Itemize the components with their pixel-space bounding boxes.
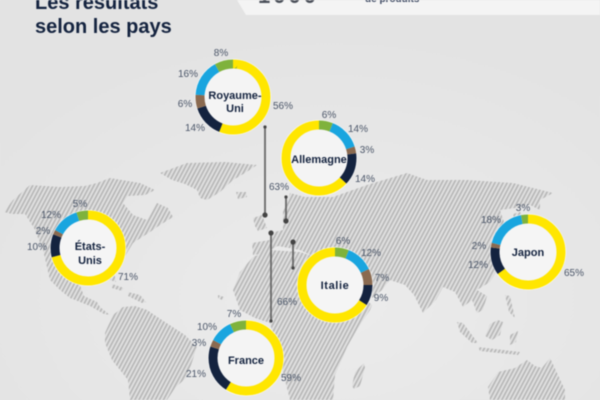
donut: États-Unis: Unis bbox=[78, 255, 102, 267]
donut: Royaume-Uni: 8% bbox=[214, 48, 228, 59]
donut: Allemagne: Allemagne bbox=[291, 154, 347, 166]
donut: Japon: Japon bbox=[512, 247, 544, 259]
donut: Royaume-Uni: Royaume- bbox=[208, 90, 262, 102]
donut: Royaume-Uni: 56% bbox=[273, 101, 293, 112]
donut: Allemagne: 6% bbox=[322, 110, 336, 121]
donut: France: 7% bbox=[227, 309, 241, 320]
donut: Italie bbox=[277, 236, 389, 323]
donut: France: 59% bbox=[281, 373, 301, 384]
donut: Royaume-Uni: 6% bbox=[178, 99, 192, 110]
donut: États-Unis: 10% bbox=[27, 242, 47, 253]
donut: Italie: 9% bbox=[374, 293, 388, 304]
donut: France: 21% bbox=[186, 369, 206, 380]
world map bbox=[4, 162, 565, 400]
donut: Royaume-Uni: Uni bbox=[226, 103, 244, 115]
connector: Royaume-Uni bbox=[262, 125, 268, 218]
connector: Italie bbox=[290, 239, 296, 270]
donut: Allemagne: 14% bbox=[355, 174, 375, 185]
donut: France: France bbox=[228, 355, 264, 367]
donut: Royaume-Uni bbox=[178, 48, 293, 135]
connector: Allemagne bbox=[283, 195, 289, 224]
donut: Royaume-Uni: 14% bbox=[185, 123, 205, 134]
donut: États-Unis: 2% bbox=[36, 226, 50, 237]
donut: Allemagne: 14% bbox=[348, 124, 368, 135]
donut: Italie: 66% bbox=[277, 297, 297, 308]
donut: France bbox=[186, 309, 301, 396]
donut: Japon: 18% bbox=[481, 215, 501, 226]
donut: France: 10% bbox=[197, 322, 217, 333]
connector: France bbox=[268, 230, 274, 323]
donut: Japon: 65% bbox=[564, 268, 584, 279]
donut: États-Unis: 5% bbox=[73, 199, 87, 210]
donut: Japon: 2% bbox=[472, 241, 486, 252]
donut: États-Unis: 71% bbox=[118, 272, 138, 283]
donut: Royaume-Uni: 16% bbox=[178, 69, 198, 80]
title: selon les pays bbox=[35, 16, 172, 38]
donut: France: 3% bbox=[192, 338, 206, 349]
donut: Japon bbox=[468, 203, 584, 290]
donut: États-Unis bbox=[27, 199, 138, 286]
donut: Italie: 7% bbox=[375, 273, 389, 284]
donut: États-Unis: États- bbox=[75, 240, 106, 253]
donut: Italie: 6% bbox=[336, 236, 350, 247]
donut: Italie: Italie bbox=[321, 280, 349, 292]
donut: Japon: 3% bbox=[516, 203, 530, 214]
top banner bbox=[237, 0, 600, 15]
donut: Japon: 12% bbox=[468, 260, 488, 271]
donut: Allemagne: 3% bbox=[360, 145, 374, 156]
donut: États-Unis: 12% bbox=[41, 210, 61, 221]
title bbox=[35, 0, 172, 38]
donut: Allemagne: 63% bbox=[269, 182, 289, 193]
donut: Italie: 12% bbox=[361, 248, 381, 259]
donut: Allemagne bbox=[269, 110, 375, 196]
